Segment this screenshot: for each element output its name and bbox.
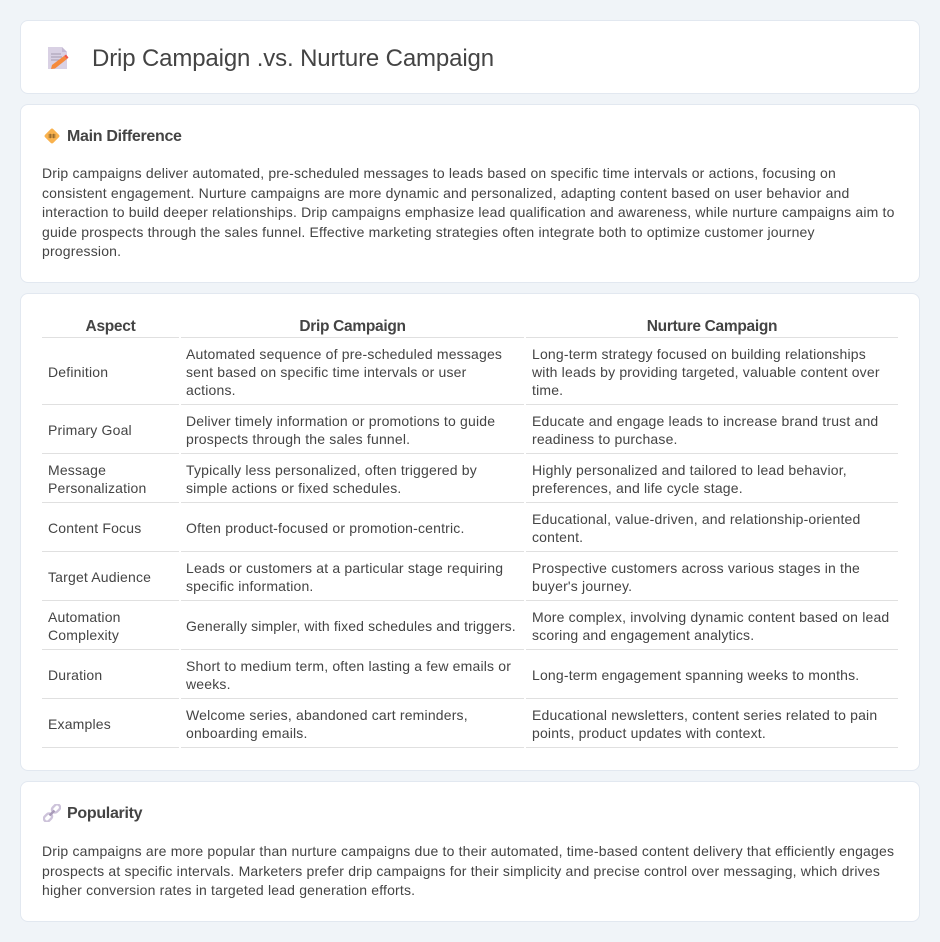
panel: popularity <box>20 781 920 922</box>
row: target audience drip: specific information. <box>186 578 314 594</box>
row: duration label: Duration <box>48 667 102 683</box>
text: popularity paragraph: prospects at specific intervals. Marketers prefer drip campaigns for their simplicity and precise control over messaging, which drives <box>42 863 880 879</box>
column header: aspect: Aspect <box>86 318 135 335</box>
row: content focus label <box>42 503 179 552</box>
row: primary goal label <box>42 405 179 454</box>
row: definition drip <box>181 338 524 405</box>
row: automation complexity drip <box>181 601 524 650</box>
text: main difference paragraph: guide prospects through the sales funnel. Effective marketing strategies often integrate both to optimize customer journey <box>42 224 815 240</box>
text: popularity paragraph: Drip campaigns are more popular than nurture campaigns due to their automated, time-based content delivery that efficiently engages <box>42 843 894 859</box>
heading: main difference: Main Difference <box>67 128 182 145</box>
row: examples nurture: points, product updates with context. <box>532 725 766 741</box>
column header: drip campaign: Drip Campaign <box>299 318 406 335</box>
row: target audience nurture: Prospective customers across various stages in the <box>532 560 860 576</box>
row: examples label <box>42 699 179 748</box>
row: personalization drip: simple actions or fixed schedules. <box>186 480 401 496</box>
row: target audience nurture: buyer's journey. <box>532 578 632 594</box>
text: main difference paragraph <box>42 165 895 259</box>
row: personalization drip: Typically less personalized, often triggered by <box>186 462 477 478</box>
row: definition nurture: with leads by providing targeted, valuable content over <box>532 364 880 380</box>
row: content focus nurture: content. <box>532 529 583 545</box>
row: primary goal nurture: readiness to purchase. <box>532 431 678 447</box>
column header: drip campaign <box>181 317 524 338</box>
row: personalization label: Personalization <box>48 480 146 496</box>
row: definition drip: Automated sequence of pre-scheduled messages <box>186 346 502 362</box>
row: duration nurture: Long-term engagement spanning weeks to months. <box>532 667 859 683</box>
row: personalization nurture <box>526 454 898 503</box>
row: examples label: Examples <box>48 716 111 732</box>
row: content focus nurture: Educational, value-driven, and relationship-oriented <box>532 511 860 527</box>
panel: comparison table <box>20 293 920 771</box>
row: examples drip <box>181 699 524 748</box>
row: examples drip: onboarding emails. <box>186 725 308 741</box>
row: personalization drip <box>181 454 524 503</box>
text: main difference paragraph: interaction to build deeper relationships. Drip campaigns emphasize lead qualification and awareness, while nurture campaigns aim to <box>42 204 895 220</box>
row: content focus nurture <box>526 503 898 552</box>
row: automation complexity nurture <box>526 601 898 650</box>
row: personalization label: Message <box>48 462 106 478</box>
row: definition drip: sent based on specific time intervals or user <box>186 364 466 380</box>
text: main difference paragraph: consistent engagement. Nurture campaigns are more dynamic and personalized, adapting content based on user behavior and <box>42 185 849 201</box>
row: primary goal drip <box>181 405 524 454</box>
row: content focus label: Content Focus <box>48 520 141 536</box>
row: examples nurture: Educational newsletters, content series related to pain <box>532 707 877 723</box>
row: definition label: Definition <box>48 364 108 380</box>
row: target audience nurture <box>526 552 898 601</box>
text: main difference paragraph: progression. <box>42 243 121 259</box>
panel: header <box>20 20 920 94</box>
row: duration drip <box>181 650 524 699</box>
panel: main difference <box>20 104 920 283</box>
column header: nurture campaign <box>526 317 898 338</box>
row: content focus drip: Often product-focused or promotion-centric. <box>186 520 465 536</box>
row: examples nurture <box>526 699 898 748</box>
row: personalization label <box>42 454 179 503</box>
row: target audience label: Target Audience <box>48 569 151 585</box>
row: duration label <box>42 650 179 699</box>
row: definition label <box>42 338 179 405</box>
row: personalization nurture: Highly personalized and tailored to lead behavior, <box>532 462 847 478</box>
row: automation complexity label: Automation <box>48 609 121 625</box>
title: Drip Campaign .vs. Nurture Campaign <box>92 45 494 72</box>
row: definition drip: actions. <box>186 382 236 398</box>
heading: popularity: Popularity <box>67 805 142 822</box>
row: automation complexity label: Complexity <box>48 627 119 643</box>
row: duration drip: weeks. <box>186 676 231 692</box>
row: automation complexity nurture: scoring and engagement analytics. <box>532 627 754 643</box>
row: definition nurture <box>526 338 898 405</box>
row: primary goal drip: Deliver timely information or promotions to guide <box>186 413 495 429</box>
row: personalization nurture: preferences, and life cycle stage. <box>532 480 743 496</box>
row: automation complexity label <box>42 601 179 650</box>
row: target audience drip: Leads or customers at a particular stage requiring <box>186 560 503 576</box>
row: duration drip: Short to medium term, often lasting a few emails or <box>186 658 511 674</box>
row: content focus drip <box>181 503 524 552</box>
text: popularity paragraph <box>42 843 894 898</box>
row: target audience label <box>42 552 179 601</box>
row: definition nurture: time. <box>532 382 563 398</box>
row: primary goal nurture <box>526 405 898 454</box>
text: popularity paragraph: higher conversion rates in targeted lead generation efforts. <box>42 882 415 898</box>
row: primary goal label: Primary Goal <box>48 422 132 438</box>
icon: diamond road sign <box>44 128 60 144</box>
row: target audience drip <box>181 552 524 601</box>
icon: chain link <box>43 804 61 822</box>
row: examples drip: Welcome series, abandoned cart reminders, <box>186 707 468 723</box>
row: definition nurture: Long-term strategy focused on building relationships <box>532 346 866 362</box>
row: duration nurture <box>526 650 898 699</box>
row: automation complexity nurture: More complex, involving dynamic content based on lead <box>532 609 889 625</box>
column header: aspect <box>42 317 179 338</box>
text: main difference paragraph: Drip campaigns deliver automated, pre-scheduled messages to leads based on specific time intervals or actions, focusing on <box>42 165 836 181</box>
row: primary goal drip: prospects through the sales funnel. <box>186 431 410 447</box>
row: automation complexity drip: Generally simpler, with fixed schedules and triggers. <box>186 618 516 634</box>
icon: document with pencil <box>48 47 68 69</box>
row: primary goal nurture: Educate and engage leads to increase brand trust and <box>532 413 878 429</box>
column header: nurture campaign: Nurture Campaign <box>647 318 777 335</box>
